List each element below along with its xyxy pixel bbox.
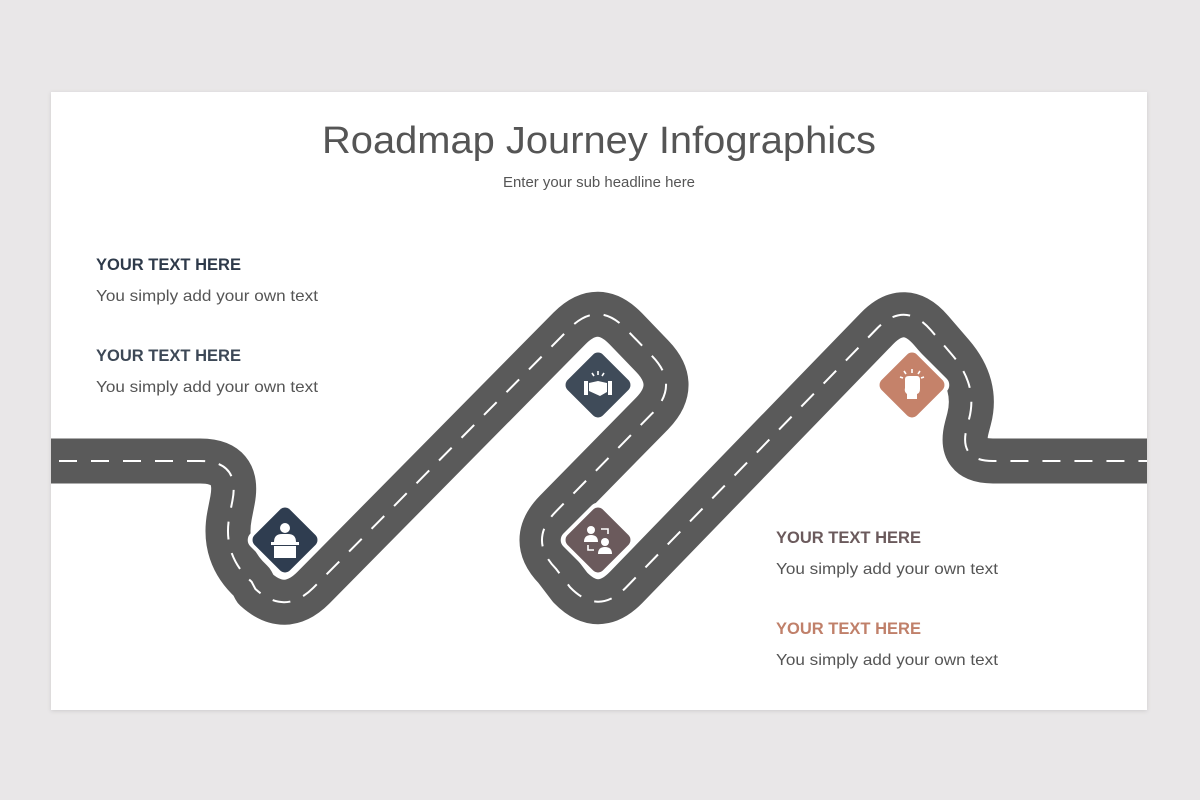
text block 2: YOUR TEXT HERE (96, 346, 241, 365)
icon 1: speaker podium (244, 499, 326, 581)
text block 4 (776, 619, 999, 669)
text block 1 (96, 255, 319, 305)
text block 1: You simply add your own text (96, 288, 319, 305)
text block 4: YOUR TEXT HERE (776, 619, 921, 638)
icon 2: handshake (557, 344, 639, 426)
text block 3 (776, 528, 999, 578)
text block 2: You simply add your own text (96, 379, 319, 396)
text block 3: YOUR TEXT HERE (776, 528, 921, 547)
icon 3: people exchange (557, 499, 639, 581)
title: Roadmap Journey Infographics (322, 120, 876, 162)
icon 4: raised fist idea (871, 344, 953, 426)
road (51, 314, 1147, 602)
text block 3: You simply add your own text (776, 561, 999, 578)
text block 1: YOUR TEXT HERE (96, 255, 241, 274)
card panel (51, 92, 1147, 710)
text block 4: You simply add your own text (776, 652, 999, 669)
text block 2 (96, 346, 319, 396)
subtitle: Enter your sub headline here (503, 174, 695, 191)
